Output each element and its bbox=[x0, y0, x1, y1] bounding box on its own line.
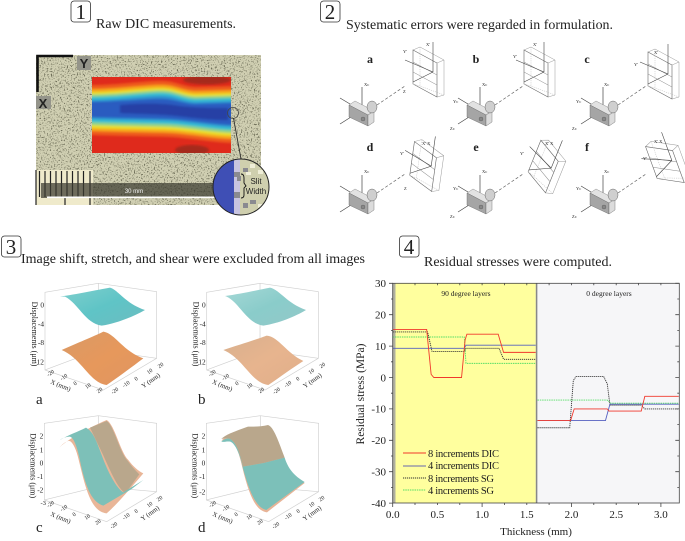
3D surface plot b: 0 bbox=[234, 381, 240, 387]
3D surface plot c: 2 bbox=[40, 431, 44, 440]
y axis tick labels: -20 bbox=[371, 435, 386, 447]
3D surface plot a: 10 bbox=[84, 382, 93, 391]
axis label X bbox=[36, 96, 51, 111]
diagram b: Y' bbox=[513, 54, 517, 59]
3D surface plot b: -12 bbox=[196, 357, 206, 366]
3D surface plot c: -20 bbox=[46, 500, 56, 509]
panel: DIC speckle photograph with displacement map bbox=[36, 55, 270, 215]
ruler bbox=[36, 170, 93, 205]
3D surface plot d: 10 bbox=[246, 513, 254, 522]
3D surface plot a: X (mm) bbox=[49, 379, 72, 393]
3D surface plot c: -10 bbox=[122, 512, 131, 522]
3D surface plot b: -10 bbox=[221, 373, 231, 382]
3D surface plot d: Displacements (μm) bbox=[191, 433, 200, 498]
diagram f: Xc bbox=[604, 169, 609, 174]
3D surface plot a: Y (mm) bbox=[140, 372, 162, 390]
x axis tick labels: 1.0 bbox=[475, 509, 489, 521]
3D surface plot a: -10 bbox=[122, 380, 131, 389]
3D surface plot b: -10 bbox=[283, 380, 293, 389]
slit marker and leader bbox=[228, 108, 241, 159]
3D surface plot b: Y (mm) bbox=[302, 372, 323, 390]
3D surface plot d: 10 bbox=[308, 501, 316, 509]
3D surface plot b: 0 bbox=[295, 376, 301, 383]
y axis tick labels: 20 bbox=[375, 310, 386, 322]
heading: systematic errors: Systematic errors were regarded in formulation. bbox=[346, 18, 613, 33]
90 degree layer region bbox=[393, 283, 536, 503]
3D surface plot c: -3 bbox=[40, 500, 47, 507]
diagram b: Yc bbox=[453, 99, 458, 104]
3D surface plot d: X (mm) bbox=[211, 511, 234, 525]
heading: residual stresses: Residual stresses were computed. bbox=[424, 255, 612, 270]
3D surface plot b: X (mm) bbox=[211, 379, 233, 393]
3D surface plot a: -8 bbox=[38, 338, 44, 347]
step 4 number badge: 4 bbox=[404, 235, 415, 259]
3D surface plot d: -20 bbox=[208, 500, 218, 509]
3D surface plot b: 20 bbox=[319, 362, 327, 370]
magnified slit width inset: Width bbox=[246, 187, 266, 196]
diagram a: Xc bbox=[364, 82, 369, 87]
y axis tick labels: -30 bbox=[371, 466, 386, 478]
diagram c: Xc bbox=[604, 82, 609, 87]
3D surface plot d bbox=[191, 416, 326, 531]
3D surface plot b: -4 bbox=[200, 319, 206, 328]
legend bbox=[403, 449, 499, 497]
legend: 8 increments DIC bbox=[428, 449, 499, 460]
3D surface plot a: 20 bbox=[96, 387, 104, 395]
3D surface plot d: 0 bbox=[202, 459, 206, 468]
y axis title: Residual stress (MPa) bbox=[355, 343, 367, 444]
diagram f: f bbox=[585, 140, 590, 154]
3D surface plot a: 0 bbox=[40, 301, 44, 310]
3D surface plot a: 0 bbox=[73, 381, 79, 387]
3D surface plot c: -2 bbox=[37, 485, 44, 494]
diagram e: X' X bbox=[545, 141, 554, 146]
3D surface plot c: Displacements (μm) bbox=[29, 433, 38, 498]
y axis tick labels bbox=[371, 278, 386, 510]
diagram c bbox=[572, 44, 679, 131]
axis label Y bbox=[77, 56, 91, 71]
3D surface plot d: 2 bbox=[202, 431, 206, 440]
diagram f: Zc bbox=[572, 214, 577, 219]
x axis tick labels: 0.0 bbox=[386, 509, 400, 521]
x axis tick labels: 2.0 bbox=[565, 509, 579, 521]
speckle background bbox=[36, 55, 261, 205]
3D surface plot c bbox=[29, 416, 164, 531]
diagram a: a bbox=[367, 52, 373, 66]
3D surface plot a: -12 bbox=[34, 357, 44, 366]
3D surface plot a: 10 bbox=[146, 368, 154, 376]
coordinate axes corner bbox=[38, 56, 73, 92]
3D surface plot c: 0 bbox=[134, 508, 140, 515]
step 1 number badge: 1 bbox=[76, 0, 86, 24]
step 3 number badge: 3 bbox=[6, 235, 16, 259]
heading: raw DIC measurements: Raw DIC measurements. bbox=[96, 17, 236, 32]
3D surface plot c: 10 bbox=[84, 513, 92, 522]
axis label X: X bbox=[39, 96, 48, 111]
3D surface plot a: 0 bbox=[134, 376, 140, 383]
diagram d: Z bbox=[404, 186, 407, 191]
3D surface plot c: -20 bbox=[109, 521, 119, 531]
x axis tick labels: 3.0 bbox=[654, 509, 668, 521]
3D surface plot d: 20 bbox=[318, 495, 326, 503]
label c: c bbox=[36, 520, 43, 536]
3D surface plot c: 1 bbox=[40, 445, 44, 454]
step 2 number badge bbox=[320, 0, 340, 24]
3D surface plot c: -10 bbox=[59, 504, 69, 513]
diagram f bbox=[572, 128, 685, 219]
3D surface plot a: -20 bbox=[110, 387, 120, 396]
step 3 number badge bbox=[2, 235, 21, 259]
3D surface plot b: 10 bbox=[308, 368, 316, 376]
diagram b: Xc bbox=[482, 82, 487, 87]
x axis tick labels: 0.5 bbox=[431, 509, 445, 521]
3D surface plot b: -8 bbox=[200, 338, 206, 347]
diagram e: Zc bbox=[450, 214, 455, 219]
3D surface plot b bbox=[192, 283, 327, 396]
diagram d: d bbox=[367, 140, 374, 154]
magnified slit width inset: Slit bbox=[250, 177, 262, 186]
3D surface plot d: -10 bbox=[221, 504, 231, 513]
diagram d bbox=[340, 133, 446, 214]
3D surface plot c: 0 bbox=[72, 512, 78, 518]
axis label Y: Y bbox=[80, 56, 89, 71]
diagram f: X' X bbox=[654, 139, 663, 144]
y axis tick labels: -40 bbox=[371, 498, 386, 510]
diagram e: Y' bbox=[520, 151, 524, 156]
diagram a: X' bbox=[426, 42, 430, 47]
diagram b: b bbox=[473, 52, 480, 66]
3D surface plot b: 0 bbox=[202, 301, 206, 310]
diagram b bbox=[450, 42, 555, 131]
90 degree layer region: 90 degree layers bbox=[441, 289, 491, 298]
diagram a bbox=[340, 42, 444, 126]
heading: image shift, stretch, shear: Image shift, stretch, and shear were excluded from all images bbox=[21, 251, 365, 266]
diagram e: e bbox=[473, 140, 479, 154]
3D surface plot a bbox=[30, 283, 165, 396]
label b: b bbox=[198, 392, 206, 408]
3D surface plot c: -1 bbox=[37, 472, 44, 481]
diagram e: Yc bbox=[453, 186, 458, 191]
x axis tick labels: 2.5 bbox=[609, 509, 624, 521]
y axis tick labels: -10 bbox=[371, 404, 386, 416]
3D surface plot b: 10 bbox=[246, 382, 254, 391]
3D surface plot c: 20 bbox=[94, 518, 103, 527]
diagram c: Yc bbox=[576, 99, 581, 104]
x axis tick labels: 1.5 bbox=[520, 509, 534, 521]
curve: 8 increments SG bbox=[393, 332, 679, 428]
3D surface plot a: 20 bbox=[157, 362, 165, 370]
panel: camera and specimen diagrams a to f bbox=[340, 42, 685, 219]
line chart: residual stress against thickness bbox=[355, 278, 679, 538]
step 4 number badge bbox=[400, 235, 419, 259]
scale bar 30 mm: 30 mm bbox=[125, 189, 143, 195]
3D surface plot c: Y (mm) bbox=[140, 505, 161, 523]
0 degree layer region: 0 degree layers bbox=[586, 289, 632, 298]
3D surface plot d: -20 bbox=[271, 521, 281, 531]
3D surface plot d: 0 bbox=[234, 512, 240, 518]
x axis title: Thickness (mm) bbox=[500, 526, 572, 538]
scale bar 30 mm bbox=[41, 183, 216, 198]
diagram c: X' bbox=[654, 50, 658, 55]
curve: 8 increments DIC bbox=[393, 329, 679, 421]
3D surface plot b: Displacements (μm) bbox=[192, 302, 201, 367]
diagram c: c bbox=[584, 52, 590, 66]
3D surface plot b: -20 bbox=[272, 387, 282, 396]
3D surface plot d: 20 bbox=[256, 518, 265, 527]
3D surface plot c: 10 bbox=[146, 501, 154, 509]
y axis tick labels: 0 bbox=[380, 372, 386, 384]
displacement colour map bbox=[88, 76, 235, 155]
diagram f: Y' bbox=[643, 156, 647, 161]
3D surface plot c: X (mm) bbox=[49, 511, 72, 525]
region divider bbox=[536, 283, 537, 503]
y axis tick labels: 10 bbox=[375, 341, 386, 353]
diagram b: Zc bbox=[450, 126, 455, 131]
legend: 4 increments SG bbox=[428, 486, 494, 497]
diagram f: Yc bbox=[576, 186, 581, 191]
3D surface plot d: -1 bbox=[199, 472, 206, 481]
3D surface plot d: 0 bbox=[296, 508, 302, 515]
3D surface plot d: 1 bbox=[202, 445, 206, 454]
3D surface plot a: Displacements (μm) bbox=[30, 302, 39, 367]
magnified slit width inset bbox=[213, 159, 270, 215]
legend: 4 increments DIC bbox=[428, 461, 499, 472]
x axis tick labels bbox=[386, 509, 668, 521]
diagram c: Zc bbox=[572, 126, 577, 131]
3D surface plot d: -2 bbox=[199, 487, 206, 496]
diagram d: X' X bbox=[422, 141, 431, 146]
label a: a bbox=[36, 392, 43, 408]
plot frame and tick marks bbox=[389, 283, 679, 507]
3D surface plot b: 20 bbox=[258, 387, 266, 395]
step 2 number badge: 2 bbox=[325, 0, 335, 24]
diagram a: Y' bbox=[403, 49, 407, 54]
3D surface plot a: -4 bbox=[38, 319, 44, 328]
3D surface plot d: Y (mm) bbox=[302, 505, 323, 523]
diagram d: Y' bbox=[400, 151, 404, 156]
y axis tick labels: 30 bbox=[375, 278, 386, 290]
legend: 8 increments SG bbox=[428, 474, 494, 485]
3D surface plot a: -20 bbox=[46, 369, 56, 378]
3D surface plot d: -10 bbox=[284, 512, 293, 522]
step 1 number badge bbox=[71, 0, 90, 24]
curve: 4 increments DIC bbox=[393, 345, 679, 421]
diagram e: Xc bbox=[482, 169, 487, 174]
curve: 4 increments SG bbox=[393, 337, 679, 403]
diagram b: X' bbox=[533, 42, 537, 47]
diagram e bbox=[450, 130, 573, 219]
3D surface plot a: -10 bbox=[59, 373, 69, 382]
3D surface plot c: 20 bbox=[156, 495, 164, 503]
diagram c: Y' bbox=[634, 62, 638, 67]
diagram d: Xc bbox=[364, 169, 369, 174]
3D surface plot c: 0 bbox=[40, 459, 44, 468]
label d: d bbox=[198, 520, 206, 536]
3D surface plot b: -20 bbox=[208, 369, 217, 378]
diagram a: Z bbox=[403, 89, 406, 94]
0 degree layer region bbox=[538, 283, 679, 503]
